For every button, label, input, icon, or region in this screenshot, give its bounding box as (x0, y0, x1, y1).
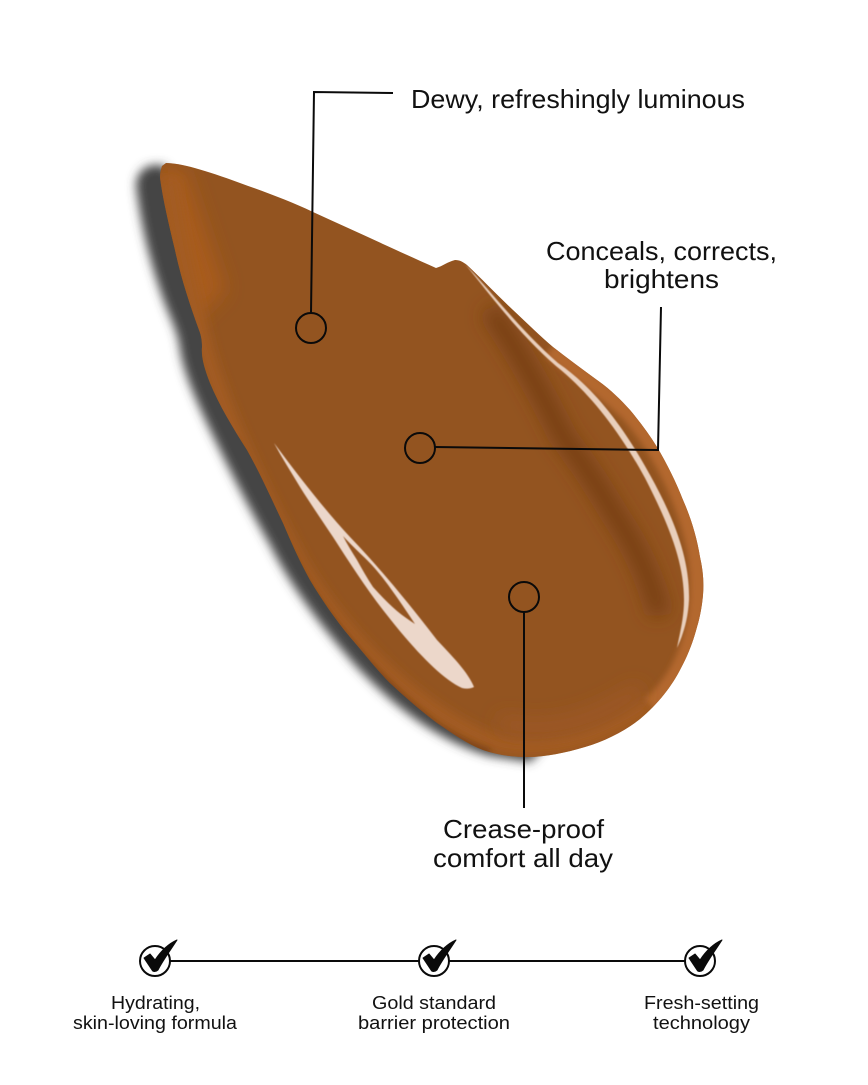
dark inner ridge (490, 310, 660, 615)
callout: conceals: brightens (604, 264, 719, 294)
callout: dewy: Dewy, refreshingly luminous (411, 84, 745, 114)
benefit: gold standard: Gold standard (372, 993, 496, 1013)
connector line (170, 960, 685, 962)
swatch shadow (136, 165, 560, 762)
lower band glow (500, 690, 640, 727)
benefit: hydrating: Hydrating, (111, 993, 200, 1013)
callout: crease-proof: Crease-proof (443, 814, 605, 844)
benefit: hydrating (73, 940, 238, 1033)
benefit: fresh-setting (644, 940, 759, 1033)
benefit: fresh-setting: Fresh-setting (644, 993, 759, 1013)
right rim light (550, 350, 698, 705)
icon: check (140, 940, 177, 976)
dark lower edge (310, 580, 490, 752)
benefit: gold standard: barrier protection (358, 1013, 510, 1033)
callout: conceals: Conceals, corrects, (546, 236, 777, 266)
icon: check (419, 940, 456, 976)
benefit: gold standard (358, 940, 510, 1033)
benefit: hydrating: skin-loving formula (73, 1013, 238, 1033)
callout: dewy (296, 84, 745, 343)
foundation swatch (158, 163, 703, 757)
callout: crease-proof (433, 582, 613, 873)
left highlight (274, 443, 474, 689)
left rim light (170, 180, 650, 748)
icon: check (685, 940, 722, 976)
right highlight (465, 264, 689, 648)
warm tip glow (160, 163, 224, 308)
callout: crease-proof: comfort all day (433, 843, 613, 873)
benefit: fresh-setting: technology (653, 1013, 750, 1033)
callout: conceals (405, 236, 777, 463)
